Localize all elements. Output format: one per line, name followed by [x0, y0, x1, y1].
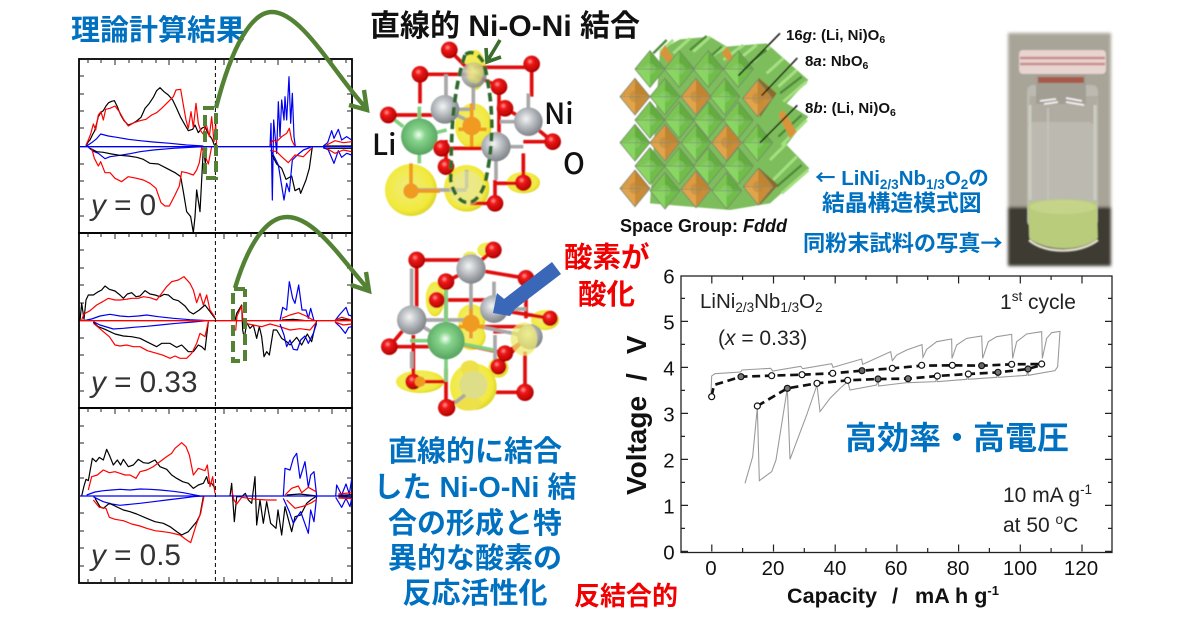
axis title: capacity: -1 [987, 583, 999, 598]
plot frame and ticks [681, 276, 1112, 552]
Fermi level dashed line [214, 59, 216, 583]
label: Ni: Ni [544, 91, 574, 133]
y axis numbers: 2 [663, 450, 675, 472]
caption: crystal structure schematic: の [968, 167, 989, 190]
text block: conclusion [374, 435, 576, 610]
x axis numbers: 0 [705, 557, 717, 580]
arrow: upper green curve to structure [216, 12, 367, 110]
structure: lower atomic model [381, 242, 559, 416]
charge-discharge gray curve [711, 331, 1060, 483]
chart: y = 0 density of states [79, 59, 352, 233]
label: first cycle: st [1012, 289, 1022, 304]
text block: conclusion: 合の形成と特 [388, 507, 562, 540]
y axis numbers: 5 [663, 312, 675, 334]
label: temperature: C [1063, 514, 1078, 537]
label: y = 0.5: y = 0.5 [89, 539, 181, 572]
label: composition: 2 [815, 300, 823, 315]
x axis numbers: 120 [1064, 557, 1098, 580]
label: Li: Li [372, 122, 397, 164]
x axis numbers: 40 [824, 557, 846, 580]
chart: y = 0.33 density of states [79, 233, 352, 408]
label: composition: LiNi [700, 290, 735, 313]
x axis numbers: 20 [762, 557, 784, 580]
measurement markers [709, 361, 1045, 409]
text block: conclusion: 直線的に結合 [388, 435, 562, 468]
structure: upper atomic model [380, 42, 561, 216]
label: current density: -1 [1080, 482, 1092, 497]
y axis numbers [663, 266, 675, 564]
structure: octahedral crystal model [620, 33, 809, 210]
label: composition: Nb [754, 290, 780, 313]
label: first cycle: 1 [1000, 291, 1012, 314]
caption: crystal structure schematic [815, 161, 989, 216]
y axis numbers: 6 [663, 266, 675, 288]
label: 8b site: 8b: (Li, Ni)O [805, 100, 890, 117]
label: 16g site: 16g: (Li, Ni)O [786, 27, 879, 44]
x axis numbers: 60 [885, 557, 907, 580]
panel: spectra stack [79, 59, 352, 583]
dashed highlight box lower [233, 289, 245, 361]
title: theoretical calculation results: 理論計算結果 [71, 14, 245, 47]
axis title: voltage: Voltage/V [621, 335, 652, 495]
callout: oxygen oxidised [564, 241, 650, 311]
label: 8b site: 6 [890, 107, 896, 119]
x axis numbers: 80 [947, 557, 969, 580]
heading: linear Ni-O-Ni bond: 直線的 Ni-O-Ni 結合 [370, 10, 640, 43]
text block: conclusion: 異的な酸素の [388, 542, 562, 575]
callout: oxygen oxidised: 酸素が [564, 241, 650, 274]
caption: crystal structure schematic: 2 [961, 177, 968, 192]
caption: crystal structure schematic: O [945, 167, 961, 190]
x axis numbers [705, 557, 1098, 580]
arrow: blue pointer to oxidised oxygen [493, 262, 561, 316]
y axis numbers: 0 [663, 542, 675, 564]
caption: crystal structure schematic: Nb [899, 167, 926, 190]
y axis numbers: 4 [663, 358, 675, 380]
dashed OCV curve: charge [712, 364, 1042, 396]
label: space group: Space Group: Fddd [620, 216, 788, 236]
arrow: lower green curve to structure [235, 217, 369, 291]
caption: crystal structure schematic: 結晶構造模式図 [822, 190, 982, 216]
label: composition: 1/3 [780, 300, 799, 315]
y axis numbers: 1 [663, 496, 675, 518]
callout: high efficiency high voltage: 高効率・高電圧 [845, 420, 1069, 456]
label: first cycle: cycle [1022, 291, 1076, 314]
label: x value: (x = 0.33) [718, 327, 807, 350]
label: y = 0.33: y = 0.33 [89, 366, 197, 399]
callout: oxygen oxidised: 酸化 [578, 279, 635, 311]
label: y = 0: y = 0 [89, 189, 156, 222]
label: composition: 2/3 [735, 300, 754, 315]
dashed highlight box upper [205, 108, 216, 178]
arrow: small green pointer to Ni-O-Ni [486, 40, 501, 62]
caption: crystal structure schematic: 1/3 [926, 177, 945, 192]
x axis numbers: 100 [1003, 557, 1037, 580]
label: composition: O [799, 290, 815, 313]
y axis numbers: 3 [663, 404, 675, 426]
label: 8a site: 6 [863, 60, 869, 72]
text block: conclusion: 反応活性化 [402, 577, 548, 610]
axis title: capacity: Capacity / mA h g [787, 583, 987, 608]
label: O: O [563, 141, 585, 183]
dashed OCV curve: discharge [757, 365, 1042, 406]
caption: crystal structure schematic: 2/3 [880, 177, 899, 192]
label: 8a site: 8a: NbO [805, 53, 863, 70]
label: temperature: at 50 [1003, 514, 1050, 537]
label: temperature: o [1056, 512, 1063, 527]
chart: voltage vs capacity [621, 266, 1112, 608]
caption: crystal structure schematic: ← LiNi [815, 161, 880, 191]
text block: conclusion: した Ni-O-Ni 結 [374, 471, 576, 504]
chart: y = 0.5 density of states [79, 408, 352, 583]
label: current density: 10 mA g [1003, 484, 1080, 507]
label: 16g site: 6 [879, 34, 885, 46]
photo: powder sample vial [1008, 33, 1111, 266]
label: antibonding: 反結合的 [574, 581, 678, 611]
caption: sample photo: 同粉末試料の写真→ [803, 226, 1003, 258]
